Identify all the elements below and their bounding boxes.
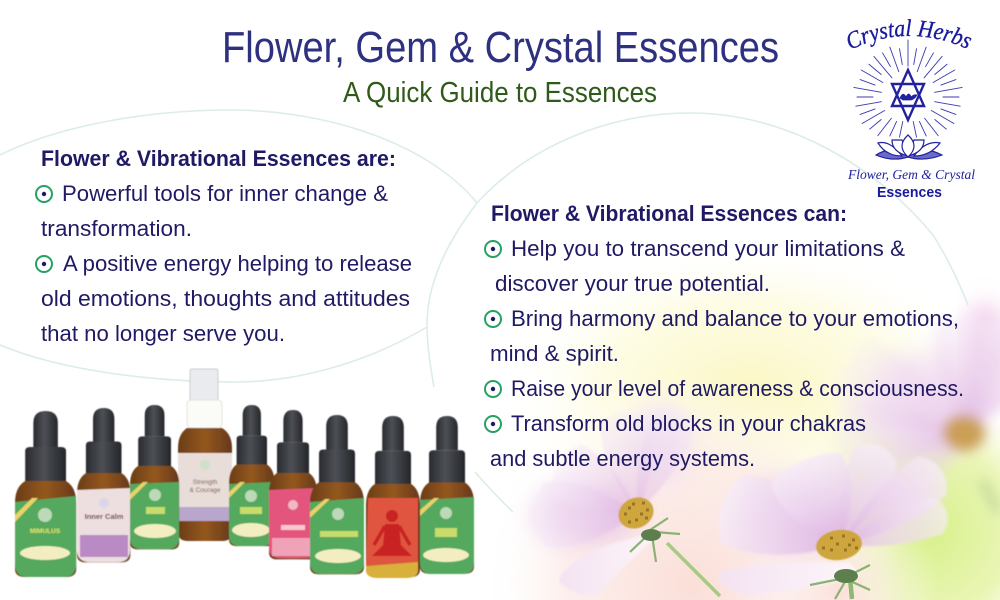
- product bottles: [15, 369, 474, 578]
- bottle: Mimulus: [15, 411, 76, 577]
- heading: Flower & Vibrational Essences can:: [491, 201, 847, 226]
- bottle: Inner Calm: Inner Calm: [85, 512, 124, 521]
- bottle: Mimulus: MIMULUS: [30, 528, 61, 535]
- panel: what essences can do: [485, 201, 964, 471]
- bottle: green 9: [420, 416, 474, 574]
- flower: blurred background cosmos: [839, 296, 1000, 514]
- bullet 2 continued: old emotions, thoughts and attitudes: [41, 286, 410, 311]
- logo: star of David: [892, 70, 924, 120]
- speech bubble outline: left: [0, 110, 477, 382]
- logo: Crystal Herbs: [848, 19, 972, 48]
- bottle: spray, Strength & Courage: & Courage: [189, 487, 221, 494]
- bullet icon: [485, 241, 501, 257]
- subtitle: A Quick Guide to Essences: [343, 77, 657, 109]
- bullet icon: [36, 186, 52, 202]
- logo: Essences: Essences: [877, 185, 942, 201]
- bottle: green 3: [130, 405, 179, 549]
- logo: rays: [854, 40, 962, 137]
- bullet icon: [485, 381, 501, 397]
- bottle: pink 6: [269, 410, 317, 559]
- flower: left cosmos: [535, 401, 720, 596]
- bottle: spray, Strength & Courage: Strength: [193, 479, 218, 486]
- bullet 1: Powerful tools for inner change &: [62, 181, 388, 206]
- bottle: red chakra: [366, 416, 420, 578]
- bullet icon: [485, 416, 501, 432]
- heading: Flower & Vibrational Essences are:: [41, 146, 396, 171]
- logo: lotus: [876, 135, 942, 159]
- bullet 1: Help you to transcend your limitations &: [511, 236, 905, 261]
- bullet 2: A positive energy helping to release: [63, 251, 412, 276]
- bullet 2: Bring harmony and balance to your emotions,: [511, 306, 959, 331]
- bullet icon: [485, 311, 501, 327]
- flower: right cosmos: [710, 438, 955, 599]
- speech bubble outline: right: [427, 113, 968, 512]
- bottle: spray, Strength & Courage: [178, 369, 232, 541]
- bullet 3: Raise your level of awareness & consciousness.: [511, 376, 964, 401]
- title: Flower, Gem & Crystal Essences: [222, 23, 779, 72]
- bottle: green 7: [310, 415, 364, 574]
- logo: tagline: Flower, Gem & Crystal: [847, 168, 975, 183]
- logo wordmark: Crystal Herbs: [848, 19, 972, 48]
- panel: what essences are: [36, 146, 412, 346]
- bottle: Inner Calm: [77, 408, 130, 562]
- bullet 4: Transform old blocks in your chakras: [511, 411, 866, 436]
- bullet 2 end: that no longer serve you.: [41, 321, 285, 346]
- background wash: [480, 240, 1000, 600]
- bullet icon: [36, 256, 52, 272]
- bullet 2 continued: mind & spirit.: [490, 341, 619, 366]
- bullet 1 continued: discover your true potential.: [495, 271, 770, 296]
- bullet 4 continued: and subtle energy systems.: [490, 446, 755, 471]
- bottle: green 5: [229, 405, 275, 546]
- bullet 1 continued: transformation.: [41, 216, 192, 241]
